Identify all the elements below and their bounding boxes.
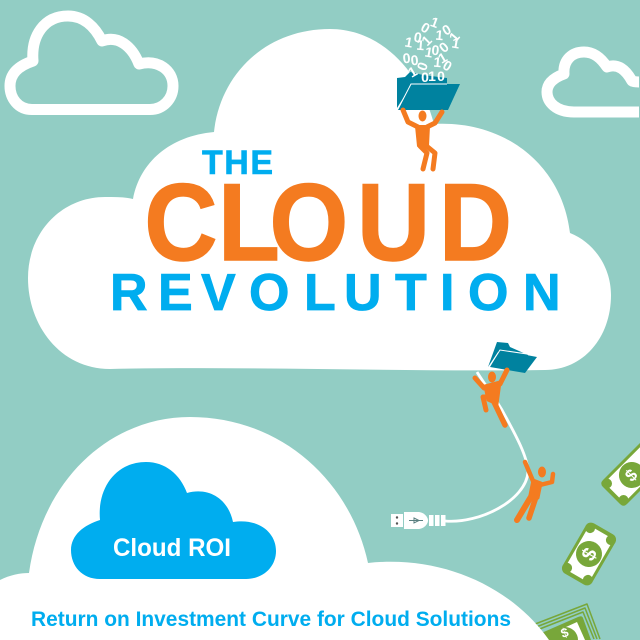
blue cloud: Cloud ROI	[71, 462, 276, 579]
folder binary digits: 0	[421, 69, 429, 85]
icon: climbing figure upper	[475, 370, 507, 425]
icon: climbing figure lower	[517, 462, 553, 520]
icon: binary digits rising from folder: 0	[402, 50, 411, 66]
icon: binary digits rising from folder: 1	[428, 13, 441, 31]
title word: CLOUD: CLOUD	[144, 161, 512, 284]
icon: binary digits rising from folder: 1	[435, 27, 444, 43]
folder binary digits	[405, 63, 445, 85]
icon: binary digits rising from folder: 1	[433, 54, 442, 70]
bottom money bill stack	[530, 604, 600, 640]
icon: binary digits rising from folder: 1	[451, 35, 461, 52]
title: The Cloud Revolution	[110, 144, 561, 322]
folder binary digits: 1	[428, 68, 436, 84]
icon: binary digits rising from folder: 1	[446, 29, 463, 45]
subtitle: Return on Investment Curve for Cloud Solutions	[31, 608, 511, 631]
icon: binary digits rising from folder: 0	[413, 29, 423, 46]
icon: folder carried by top figure	[397, 63, 460, 110]
icon: binary digits rising from folder: 0	[418, 19, 433, 37]
icon: binary digits rising from folder: 1	[418, 32, 435, 49]
icon: outline cloud top right	[547, 52, 639, 112]
folder binary digits: 0	[437, 68, 445, 84]
bottom white cloud	[0, 417, 549, 640]
icon: binary digits rising from folder: 0	[431, 42, 440, 58]
USB plug	[391, 512, 446, 529]
icon: binary digits rising from folder: 0	[410, 52, 419, 68]
icon: binary digits rising from folder: 0	[436, 38, 452, 56]
icon: binary digits rising from folder	[402, 13, 463, 75]
icon: money bill middle	[560, 520, 618, 588]
title word: THE: THE	[202, 144, 273, 182]
icon: outline cloud top left	[10, 16, 173, 110]
icon: binary digits rising from folder: 1	[416, 37, 425, 53]
icon: money bill upper right	[601, 443, 640, 506]
icon: money bill middle: $	[578, 544, 602, 565]
icon: binary digits rising from folder: 1	[435, 49, 450, 67]
icon: USB cable	[391, 372, 528, 529]
icon: binary digits rising from folder: 0	[439, 21, 454, 39]
main white cloud	[28, 29, 611, 370]
icon: binary digits rising from folder: 0	[413, 60, 431, 73]
icon: binary digits rising from folder: 1	[424, 44, 434, 61]
icon: orange figure holding folder	[403, 110, 442, 169]
title word: REVOLUTION: REVOLUTION	[110, 264, 561, 322]
icon: binary digits rising from folder: 0	[440, 57, 455, 75]
icon: binary digits rising from folder: 1	[404, 34, 414, 51]
cloud label: Cloud ROI	[113, 534, 231, 562]
folder binary digits: 1	[405, 63, 420, 81]
icon: folder carried by climbing figure	[488, 342, 537, 373]
